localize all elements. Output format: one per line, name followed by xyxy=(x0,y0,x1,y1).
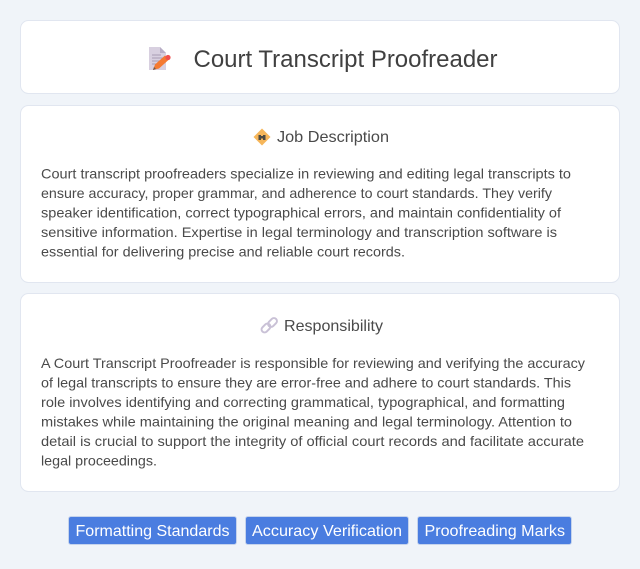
title: Court Transcript Proofreader xyxy=(194,46,498,73)
text: job description body xyxy=(41,166,571,260)
tag: proofreading marks xyxy=(418,516,572,544)
tag: formatting standards xyxy=(68,516,236,544)
text: responsibility body: role involves identifying and correcting grammatical, typographical, and formatting xyxy=(41,394,565,410)
text: responsibility body: A Court Transcript Proofreader is responsible for reviewing and verifying the accuracy xyxy=(41,355,585,371)
panel: job description xyxy=(20,106,620,282)
text: responsibility body: of legal transcripts to ensure they are error-free and adhere to court standards. This xyxy=(41,374,571,390)
text: job description body: ensure accuracy, proper grammar, and adherence to court standards. They verify xyxy=(41,185,552,201)
heading: responsibility: Responsibility xyxy=(284,318,383,335)
text: job description body: essential for delivering precise and reliable court records. xyxy=(41,244,405,260)
tag: proofreading marks: Proofreading Marks xyxy=(424,523,565,540)
text: responsibility body: mistakes while maintaining the original meaning and legal terminology. Attention to xyxy=(41,414,572,430)
panel: responsibility xyxy=(20,294,620,492)
text: job description body: speaker identification, correct typographical errors, and maintain confidentiality of xyxy=(41,204,561,220)
tag: formatting standards: Formatting Standards xyxy=(76,523,230,540)
heading: job description: Job Description xyxy=(277,129,389,146)
text: job description body: sensitive information. Expertise in legal terminology and transcription software is xyxy=(41,224,557,240)
panel: title header xyxy=(20,20,620,94)
icon: document with pencil xyxy=(149,47,171,70)
icon: chain link xyxy=(260,317,278,334)
icon: diamond sign xyxy=(254,128,270,146)
text: job description body: Court transcript proofreaders specialize in reviewing and editing legal transcripts to xyxy=(41,166,571,182)
text: responsibility body xyxy=(41,355,585,468)
text: responsibility body: legal proceedings. xyxy=(41,452,157,468)
tag: accuracy verification: Accuracy Verification xyxy=(252,523,402,540)
text: responsibility body: detail is crucial to support the integrity of official court records and facilitate accurate xyxy=(41,433,584,449)
tag: accuracy verification xyxy=(246,516,408,544)
